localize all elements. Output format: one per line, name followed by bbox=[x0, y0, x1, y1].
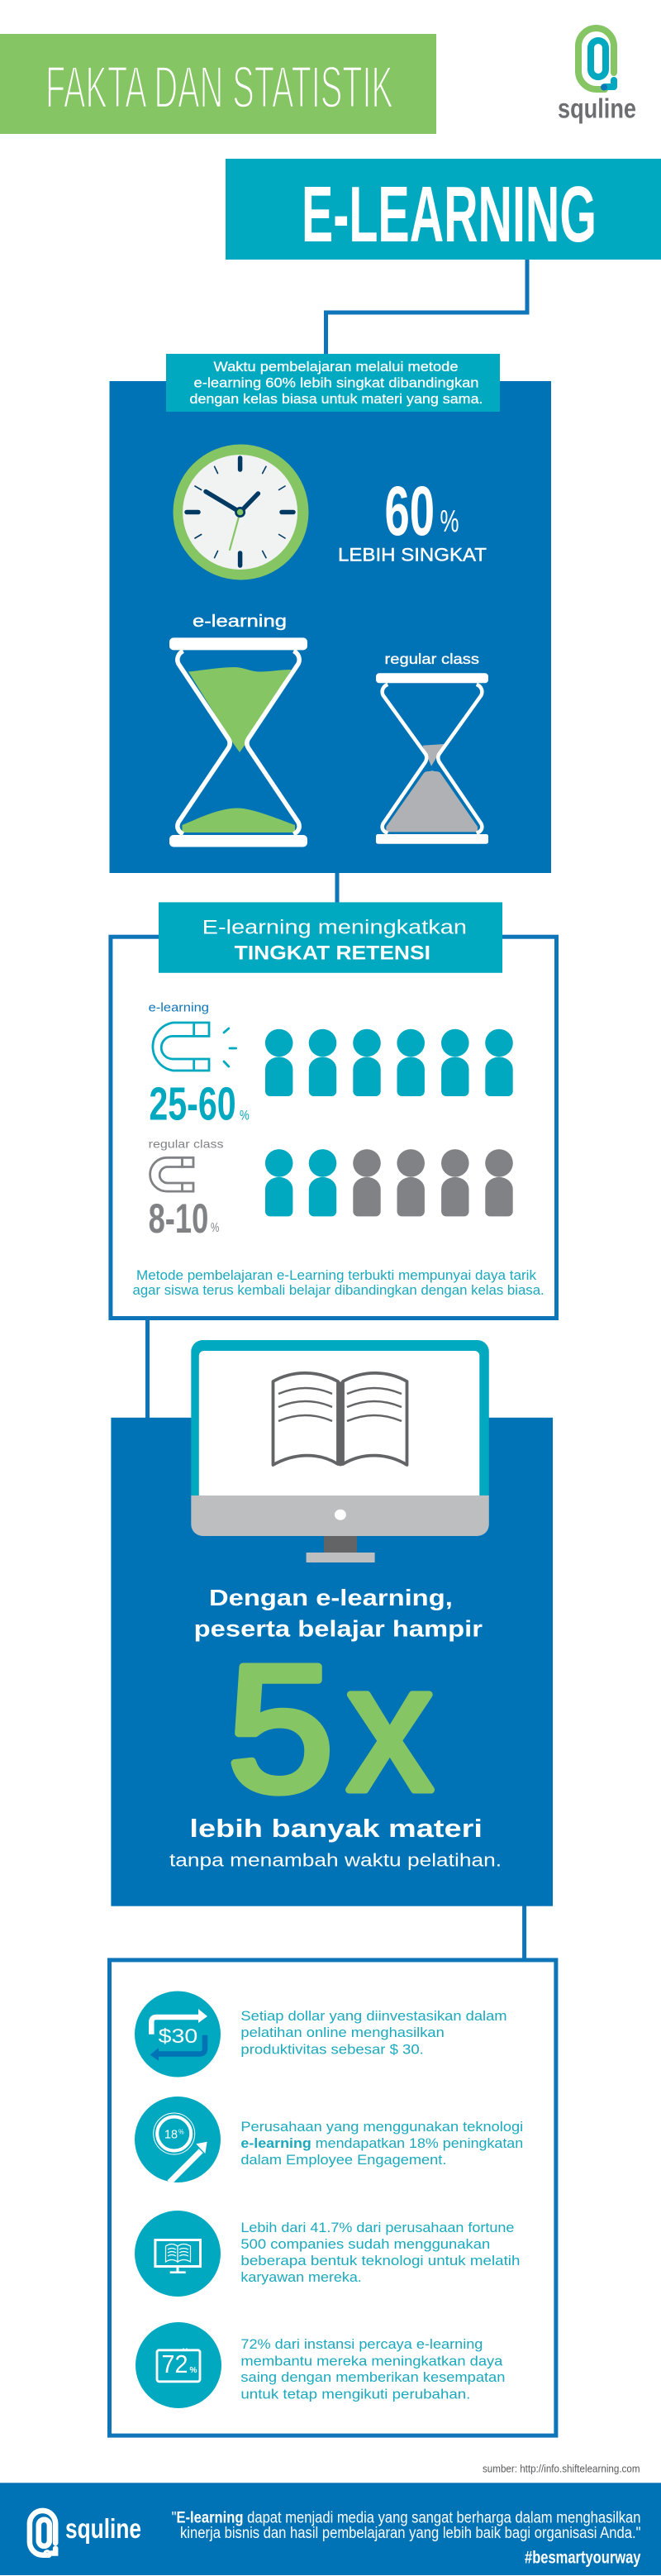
text: dengan e-learning: Dengan e-learning, bbox=[209, 1585, 453, 1610]
connector lines bbox=[147, 260, 527, 1959]
people row: e-learning bbox=[265, 1029, 513, 1096]
text: setiap dollar: Setiap dollar yang diinvestasikan dalam bbox=[240, 2008, 507, 2024]
text: lebih banyak materi: tanpa menambah waktu pelatihan. bbox=[169, 1850, 502, 1870]
icon: large magnet bbox=[153, 1023, 236, 1071]
logo: squline bbox=[558, 28, 636, 125]
stat: 60 percent lebih singkat: LEBIH SINGKAT bbox=[338, 545, 487, 565]
icon: 72 percent tablet: % bbox=[190, 2366, 197, 2375]
label: regular class: regular class bbox=[385, 651, 479, 667]
text: 72 persen instansi: membantu mereka meningkatkan daya bbox=[240, 2353, 503, 2368]
text: perusahaan teknologi: Perusahaan yang menggunakan teknologi bbox=[240, 2119, 523, 2135]
stat: 60 percent lebih singkat bbox=[338, 472, 487, 565]
stat: 60 percent lebih singkat: % bbox=[440, 504, 459, 539]
icon: regular class hourglass bbox=[376, 673, 488, 844]
stat: 8-10 percent: % bbox=[211, 1221, 219, 1235]
text: setiap dollar: produktivitas sebesar $ 30. bbox=[240, 2041, 424, 2057]
text: metode pembelajaran bbox=[132, 1268, 544, 1298]
stat: 25-60 percent: % bbox=[240, 1109, 250, 1123]
icon: monitor book bbox=[135, 2211, 221, 2297]
icon: clock bbox=[174, 445, 309, 580]
stat: 8-10 percent: 8-10 bbox=[149, 1195, 208, 1242]
icon: 72 percent tablet bbox=[136, 2322, 221, 2408]
heading: tingkat retensi: E-learning meningkatkan bbox=[202, 917, 467, 939]
label: regular class retention: regular class bbox=[149, 1138, 224, 1151]
text: 72 persen instansi bbox=[240, 2336, 505, 2402]
callout: waktu pembelajaran: dengan kelas biasa untuk materi yang sama. bbox=[190, 392, 483, 407]
text: dengan e-learning bbox=[194, 1585, 483, 1642]
panel: fakta statistik bbox=[109, 1960, 556, 2435]
heading: tingkat retensi bbox=[159, 902, 502, 973]
logo: footer squline bbox=[30, 2511, 141, 2555]
stat: 5x bbox=[227, 1628, 433, 1829]
stat: 60 percent lebih singkat: 60 bbox=[385, 472, 435, 550]
text: metode pembelajaran: Metode pembelajaran e-Learning terbukti mempunyai daya tarik bbox=[136, 1268, 537, 1283]
icon: 72 percent tablet: 72 bbox=[162, 2349, 188, 2378]
heading: tingkat retensi: TINGKAT RETENSI bbox=[235, 942, 430, 965]
text: perusahaan teknologi: e-learning mendapatkan 18% peningkatan bbox=[240, 2135, 523, 2151]
icon: 30 dollar return: $30 bbox=[159, 2025, 197, 2048]
icon: 18 percent engagement: % bbox=[178, 2129, 184, 2136]
text: 72 persen instansi: 72% dari instansi percaya e-learning bbox=[240, 2336, 483, 2352]
label: e-learning retention: e-learning bbox=[149, 1002, 209, 1015]
source credit: sumber: http://info.shiftelearning.com bbox=[483, 2464, 640, 2475]
icon: 30 dollar return bbox=[135, 1991, 221, 2077]
footer band bbox=[0, 2483, 661, 2575]
icon: open book bbox=[273, 1373, 407, 1465]
callout: waktu pembelajaran: e-learning 60% lebih singkat dibandingkan bbox=[193, 375, 479, 390]
stat: 25-60 percent: 25-60 bbox=[149, 1078, 236, 1131]
text: 72 persen instansi: saing dengan memberikan kesempatan bbox=[240, 2369, 505, 2385]
text: perusahaan teknologi bbox=[240, 2119, 523, 2168]
people row: regular class bbox=[265, 1149, 513, 1216]
icon: e-learning hourglass bbox=[169, 637, 307, 847]
text: lebih dari 41.7 persen bbox=[240, 2220, 520, 2285]
text: lebih dari 41.7 persen: Lebih dari 41.7% dari perusahaan fortune bbox=[240, 2220, 514, 2235]
text: lebih banyak materi bbox=[169, 1814, 502, 1870]
stat: 5x: x bbox=[347, 1628, 433, 1829]
icon: small magnet bbox=[150, 1157, 193, 1191]
text: perusahaan teknologi: dalam Employee Engagement. bbox=[240, 2152, 446, 2168]
icon: 18 percent engagement: 18 bbox=[164, 2128, 178, 2142]
panel: waktu pembelajaran bbox=[109, 354, 551, 873]
panel: tingkat retensi bbox=[111, 902, 556, 1318]
text: lebih dari 41.7 persen: 500 companies sudah menggunakan bbox=[240, 2236, 490, 2252]
quote bbox=[172, 2510, 641, 2542]
callout: waktu pembelajaran: Waktu pembelajaran melalui metode bbox=[213, 360, 458, 374]
label: e-learning: e-learning bbox=[193, 613, 287, 631]
logo: squline: squline bbox=[558, 94, 636, 125]
logo: footer squline: squline bbox=[65, 2513, 141, 2544]
stat: 5x: 5 bbox=[227, 1629, 334, 1829]
text: lebih banyak materi: lebih banyak materi bbox=[189, 1814, 483, 1843]
callout: waktu pembelajaran bbox=[166, 354, 500, 412]
header banner: fakta dan statistik bbox=[0, 34, 436, 134]
text: setiap dollar: pelatihan online menghasilkan bbox=[240, 2025, 445, 2040]
text: 72 persen instansi: untuk tetap mengikuti perubahan. bbox=[240, 2386, 470, 2402]
panel: 5x lebih banyak materi bbox=[111, 1340, 553, 1906]
text: lebih dari 41.7 persen: karyawan mereka. bbox=[240, 2269, 362, 2285]
header banner: fakta dan statistik: FAKTA DAN STATISTIK bbox=[45, 55, 393, 121]
text: dengan e-learning: peserta belajar hampir bbox=[194, 1616, 483, 1642]
text: setiap dollar bbox=[240, 2008, 507, 2057]
icon: 18 percent engagement bbox=[135, 2097, 221, 2182]
text: lebih dari 41.7 persen: beberapa bentuk teknologi untuk melatih bbox=[240, 2253, 520, 2268]
text: metode pembelajaran: agar siswa terus kembali belajar dibandingkan dengan kelas biasa. bbox=[132, 1283, 544, 1298]
icon: monitor with book bbox=[191, 1340, 489, 1562]
